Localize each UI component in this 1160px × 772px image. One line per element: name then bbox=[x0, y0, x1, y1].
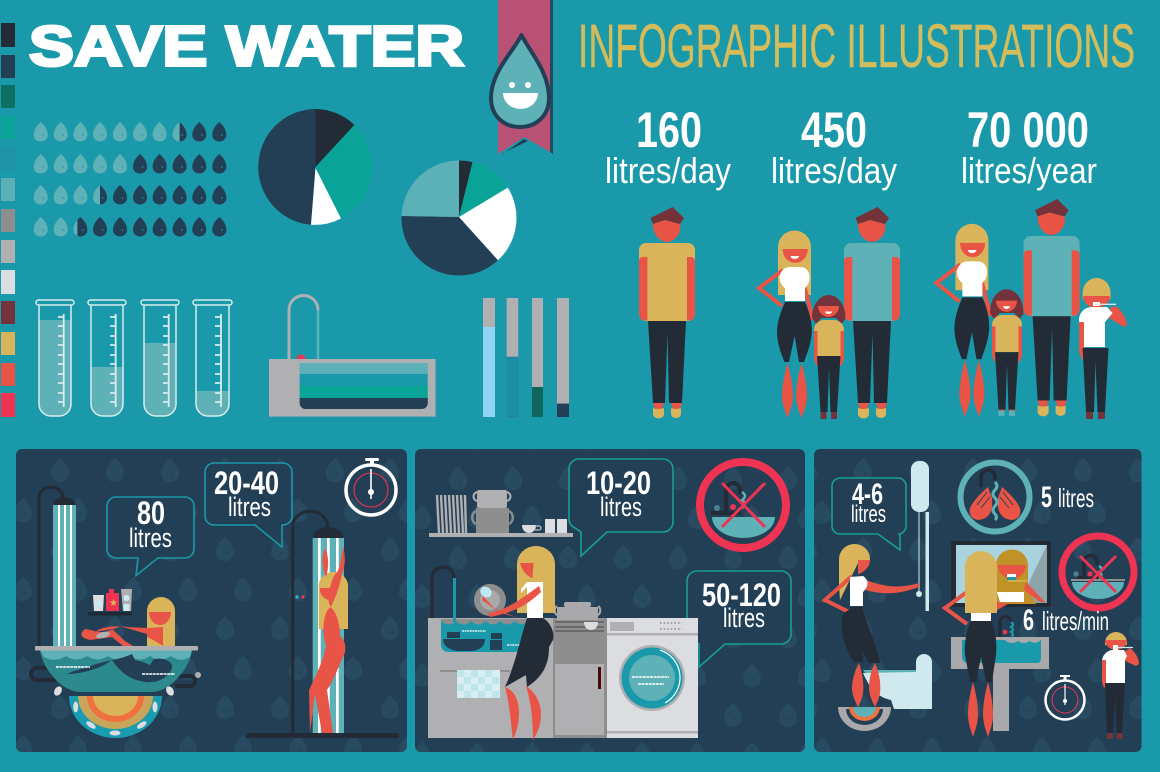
woman bbox=[759, 230, 813, 418]
girl bbox=[990, 289, 1023, 416]
woman washing dishes bbox=[474, 546, 555, 740]
colour palette swatches bbox=[1, 23, 15, 417]
stat: 70 000 litres/year: 70 000 bbox=[967, 102, 1089, 158]
icon: hand washing: 5 bbox=[1041, 481, 1052, 514]
bath shower pipe and water bbox=[39, 487, 76, 646]
icon: hand washing: litres bbox=[1058, 483, 1094, 513]
label: 6 litres per minute: litres/min bbox=[1042, 606, 1109, 636]
small stopwatch bbox=[1046, 675, 1084, 720]
rug under toilet bbox=[838, 707, 891, 731]
man bbox=[1024, 199, 1080, 416]
bubble: 4-6 litres bbox=[832, 478, 906, 550]
stat: 160 litres/day: 160 bbox=[636, 102, 702, 158]
stat: 160 litres/day bbox=[605, 102, 731, 191]
bubble: 10-20 litres: 10-20 bbox=[586, 465, 651, 501]
test tube 4 bbox=[193, 300, 232, 416]
level bars bbox=[483, 298, 569, 417]
pie chart one bbox=[258, 109, 372, 225]
bubble: 50-120 litres bbox=[687, 571, 791, 667]
woman at toilet bbox=[825, 544, 919, 707]
shelf with toiletries bbox=[88, 589, 132, 616]
toilet cistern and flush pipe bbox=[911, 461, 929, 611]
bubble: 4-6 litres: 4-6 bbox=[852, 478, 883, 511]
test tubes bbox=[36, 300, 232, 416]
shelf with dishes bbox=[429, 490, 573, 537]
washbasin bbox=[951, 616, 1049, 731]
title: save water: SAVE WATER bbox=[29, 14, 464, 78]
bubble: 50-120 litres: litres bbox=[723, 603, 765, 633]
test tube 3 bbox=[141, 300, 179, 416]
icon: no running tap small bbox=[1062, 536, 1134, 608]
pie chart two bbox=[401, 160, 516, 275]
bubble: 20-40 litres: 20-40 bbox=[214, 465, 279, 501]
ribbon with water drop mascot bbox=[491, 0, 553, 155]
washing machine bbox=[607, 618, 698, 738]
girl bbox=[812, 295, 845, 419]
stopwatch bbox=[346, 458, 396, 515]
bath rug with fish bbox=[69, 696, 162, 738]
boy brushing teeth bbox=[1102, 632, 1139, 739]
bubble: 50-120 litres: 50-120 bbox=[702, 577, 781, 613]
panel: bathroom shower and bath bbox=[16, 449, 407, 752]
family of four bbox=[936, 199, 1127, 419]
panel: toilet and washbasin bbox=[814, 449, 1142, 752]
kitchen cabinet and sink bbox=[428, 567, 553, 738]
boy brushing teeth bbox=[1079, 278, 1127, 419]
stat: 160 litres/day: litres/day bbox=[605, 150, 731, 191]
stat: 450 litres/day: 450 bbox=[801, 102, 867, 158]
bubble: 10-20 litres: litres bbox=[600, 492, 642, 522]
shower and woman bbox=[246, 511, 399, 738]
stat: 450 litres/day bbox=[771, 102, 897, 191]
woman bbox=[936, 224, 990, 417]
label: 6 litres per minute bbox=[1023, 604, 1109, 637]
bubble: 20-40 litres: litres bbox=[228, 492, 271, 522]
man bbox=[844, 207, 900, 418]
stat: 70 000 litres/year bbox=[961, 102, 1097, 191]
bubble: 80 litres: litres bbox=[129, 523, 172, 553]
bubble: 10-20 litres bbox=[569, 459, 673, 556]
panel: kitchen bbox=[415, 449, 805, 752]
mirror with reflection bbox=[951, 541, 1051, 611]
bubble: 80 litres: 80 bbox=[137, 495, 165, 531]
bathtub level chart bbox=[269, 296, 436, 417]
test tube 2 bbox=[88, 300, 126, 416]
shelf with toiletries: ★ bbox=[109, 598, 118, 609]
icon: no running tap bbox=[700, 462, 786, 548]
bubble: 20-40 litres bbox=[205, 463, 292, 547]
test tube 1 bbox=[36, 300, 74, 416]
bathtub bbox=[31, 646, 201, 697]
label: 6 litres per minute: 6 bbox=[1023, 604, 1034, 637]
icon: hand washing bbox=[960, 462, 1094, 532]
stat: 70 000 litres/year: litres/year bbox=[961, 150, 1097, 191]
bubble: 4-6 litres: litres bbox=[851, 501, 886, 528]
person: single man bbox=[639, 207, 695, 418]
bather bbox=[81, 597, 175, 647]
family of three bbox=[759, 207, 900, 419]
woman at washbasin bbox=[945, 551, 997, 737]
toilet bbox=[863, 654, 932, 709]
dishwasher unit bbox=[553, 602, 607, 738]
stat: 450 litres/day: litres/day bbox=[771, 150, 897, 191]
water drop pictogram grid bbox=[34, 122, 226, 236]
bubble: 80 litres bbox=[107, 495, 194, 576]
